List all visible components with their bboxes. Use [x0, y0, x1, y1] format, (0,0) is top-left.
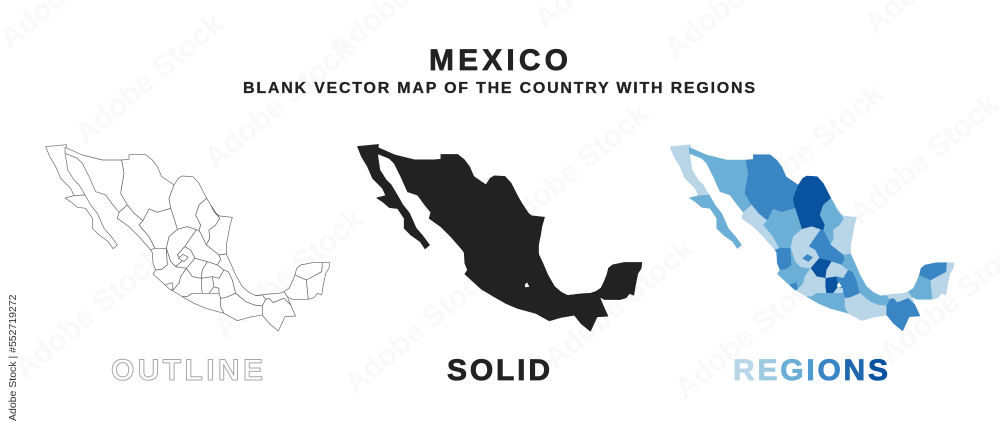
label: solid: SOLID [447, 354, 550, 387]
map: solid [358, 145, 642, 331]
watermark: Adobe Stock [208, 202, 370, 345]
label: regions: REGIONS [733, 354, 888, 387]
hole: Mexico City [837, 282, 842, 287]
watermark: Adobe Stock [198, 32, 360, 175]
watermark: Adobe Stock [493, 97, 655, 240]
watermark: Adobe Stock [8, 242, 170, 385]
watermark: Adobe Stock [728, 77, 890, 220]
watermark: Adobe Stock [68, 7, 230, 150]
map: regions [670, 145, 954, 331]
watermark: Adobe Stock [338, 257, 500, 400]
stock id: Adobe Stock | #552719272 [7, 294, 19, 421]
watermark: Adobe Stock [538, 232, 700, 375]
label: outline: OUTLINE [111, 354, 263, 387]
hole: Mexico City [525, 282, 529, 287]
map: outline [46, 145, 330, 331]
title: MEXICO [429, 44, 568, 77]
subtitle: BLANK VECTOR MAP OF THE COUNTRY WITH REGIONS [243, 80, 755, 97]
watermark: Adobe Stock [668, 262, 830, 405]
